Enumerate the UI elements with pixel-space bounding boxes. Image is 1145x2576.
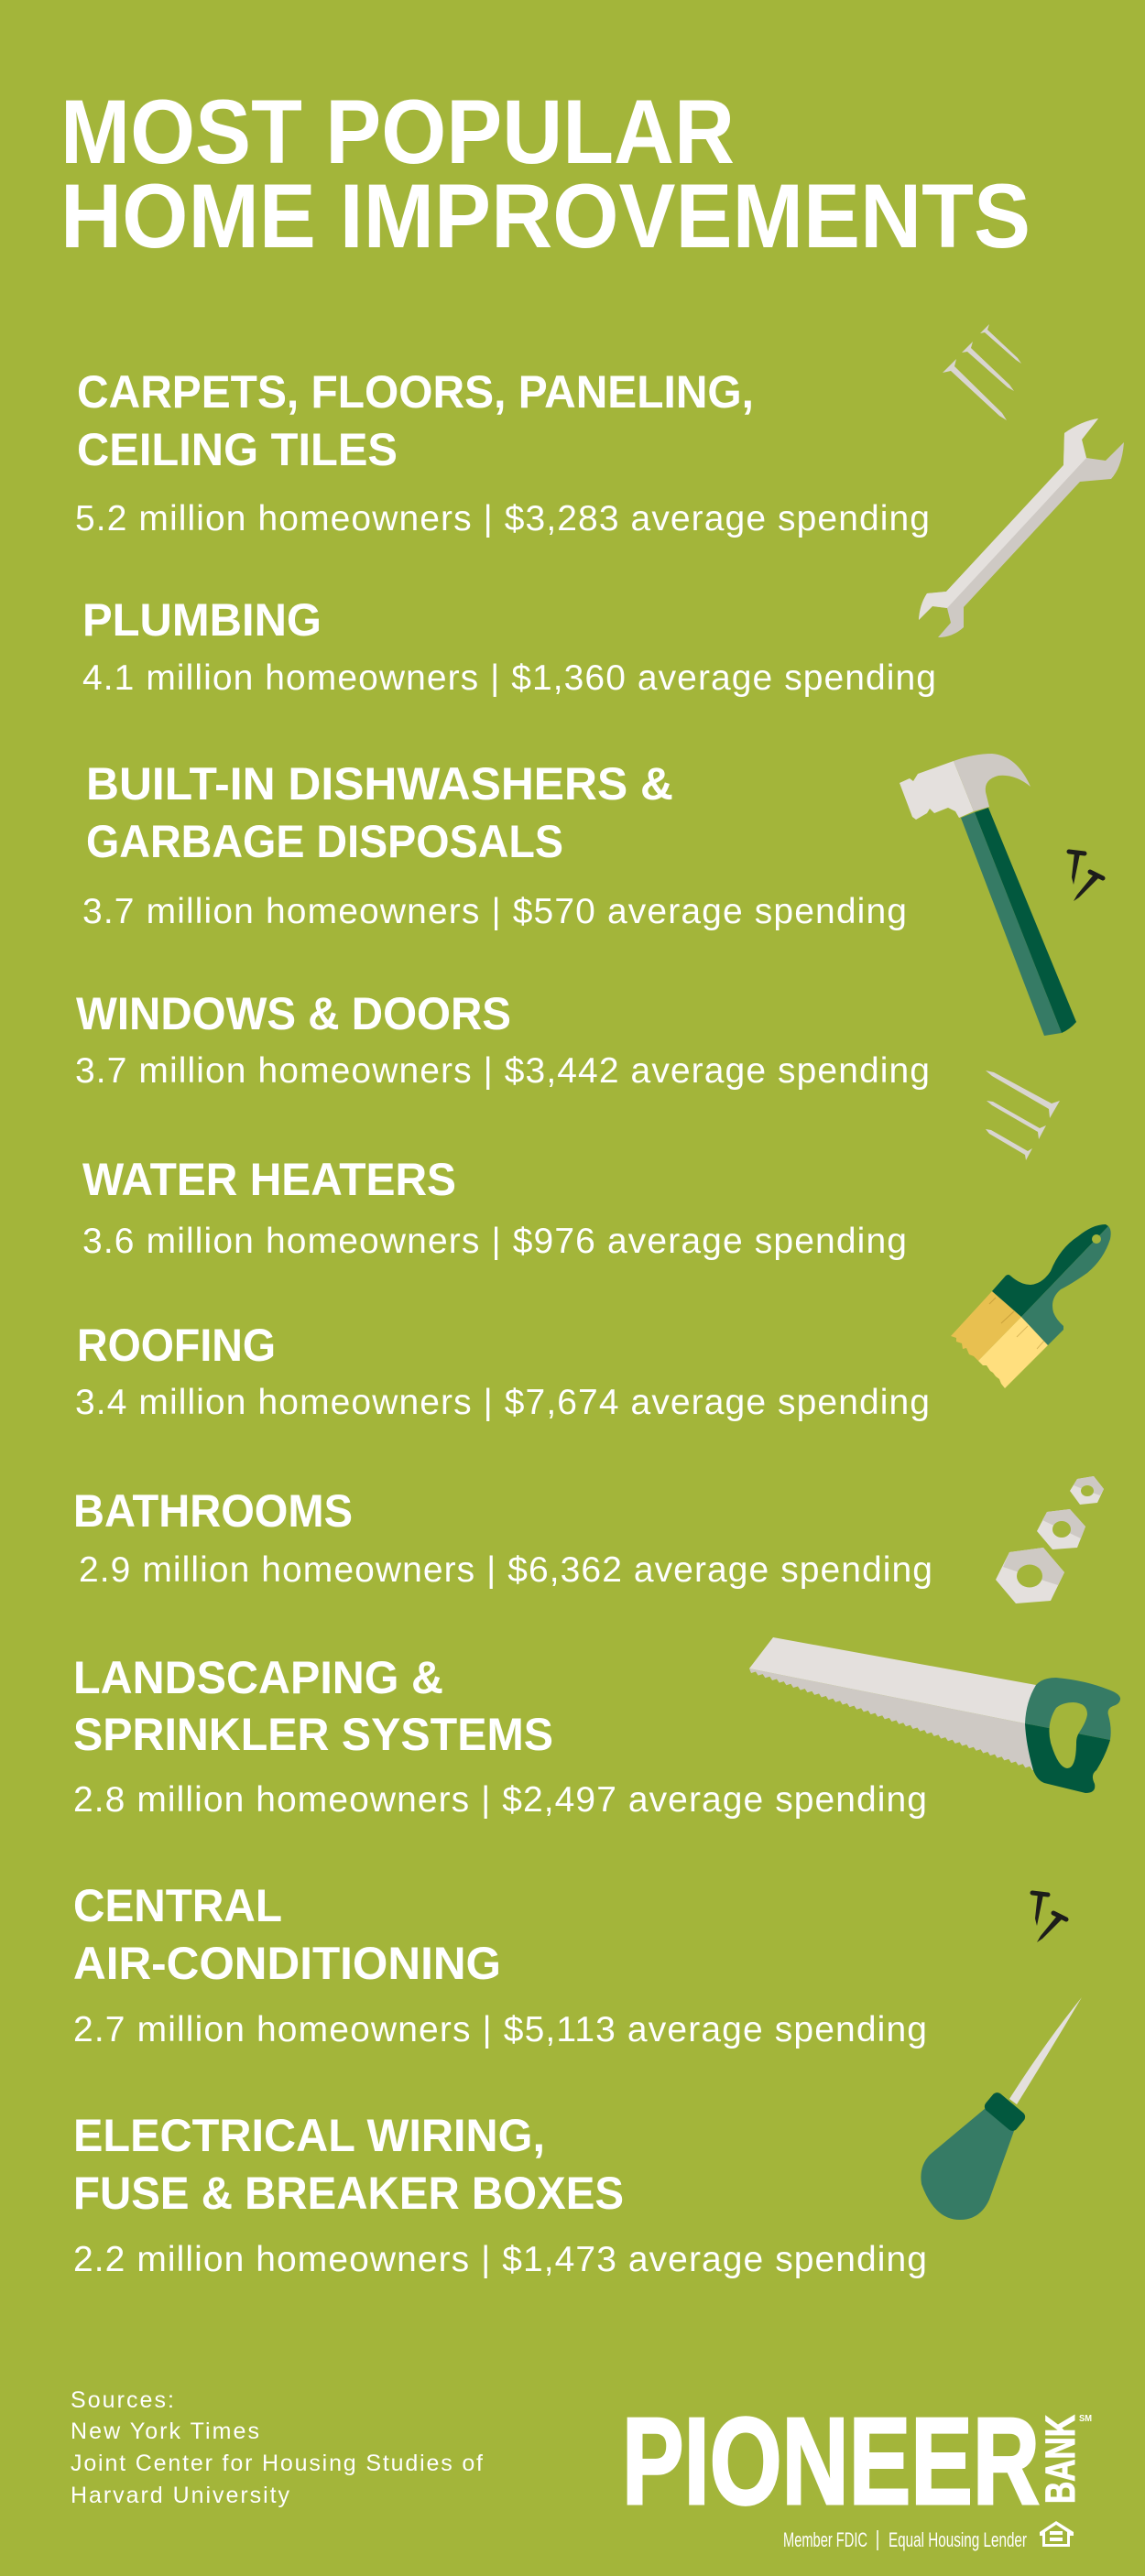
saw handle [1025,1678,1120,1793]
icon: equal housing [1040,2521,1074,2547]
heading: ROOFING [77,1320,276,1371]
heading [73,2110,624,2219]
heading: ELECTRICAL WIRING, [73,2110,545,2161]
heading [73,1880,501,1989]
title [60,81,1030,266]
member line: Member FDIC [783,2528,867,2551]
item: plumbing [82,594,936,698]
statistics: 3.7 million homeowners | $3,442 average spending [75,1051,930,1091]
awl collar [982,2091,1028,2133]
item: windows and doors [75,988,930,1091]
heading: GARBAGE DISPOSALS [86,816,563,867]
icon: awl [921,1997,1082,2220]
statistics: 4.1 million homeowners | $1,360 average spending [82,658,936,698]
statistics: 2.2 million homeowners | $1,473 average spending [73,2240,927,2279]
icon: hex nuts [996,1476,1104,1603]
heading: CEILING TILES [77,424,398,475]
heading: AIR-CONDITIONING [73,1938,501,1989]
heading: BATHROOMS [73,1485,353,1537]
icon: hammer [900,754,1076,1036]
sources: Joint Center for Housing Studies of [71,2451,483,2476]
icon: black tacks [1069,852,1103,901]
icon: black tacks lower [1032,1893,1066,1942]
member line: Equal Housing Lender [889,2528,1027,2551]
title: HOME IMPROVEMENTS [60,165,1030,266]
heading: PLUMBING [82,594,322,646]
statistics: 3.4 million homeowners | $7,674 average spending [75,1383,930,1422]
medium nut [1037,1509,1085,1549]
heading: BUILT-IN DISHWASHERS & [86,758,673,810]
heading: WINDOWS & DOORS [76,988,511,1039]
heading [73,1652,553,1760]
awl pin [1009,1997,1082,2104]
heading: FUSE & BREAKER BOXES [73,2168,624,2219]
small nut [1070,1476,1104,1505]
sources: Harvard University [71,2483,289,2508]
awl handle [921,2108,1014,2220]
hammer handle [961,808,1076,1036]
icon: paint brush [951,1224,1111,1388]
item: water heaters [82,1154,907,1261]
heading: WATER HEATERS [82,1154,456,1205]
sources [71,2387,483,2508]
icon: three silver nails middle [986,1071,1060,1160]
hammer head [900,754,1030,820]
icon: three silver nails top [943,324,1021,420]
statistics: 3.7 million homeowners | $570 average spending [82,892,907,931]
sources: New York Times [71,2418,259,2444]
statistics: 2.7 million homeowners | $5,113 average spending [73,2010,927,2049]
item: bathrooms [73,1485,932,1590]
statistics: 2.9 million homeowners | $6,362 average spending [79,1550,932,1590]
service mark: SM [1079,2414,1092,2424]
icon: wrench [919,418,1124,637]
heading: CARPETS, FLOORS, PANELING, [77,366,754,418]
item: central air-conditioning [73,1880,927,2049]
heading: SPRINKLER SYSTEMS [73,1709,553,1760]
bank vertical: BANK [1037,2415,1084,2504]
title: MOST POPULAR [60,81,735,182]
heading: LANDSCAPING & [73,1652,443,1703]
heading: CENTRAL [73,1880,282,1931]
logo: Pioneer Bank [622,2392,1092,2551]
bristles [951,1291,1048,1388]
sources: Sources: [71,2387,174,2413]
heading [77,366,754,475]
item: electrical wiring, fuse and breaker boxes [73,2110,927,2279]
item: roofing [75,1320,930,1422]
icon: hand saw [749,1637,1120,1793]
statistics: 2.8 million homeowners | $2,497 average spending [73,1780,927,1820]
item: carpets, floors, paneling, ceiling tiles [75,366,930,538]
item: landscaping and sprinkler systems [73,1652,927,1820]
large nut [996,1548,1064,1603]
item: built-in dishwashers and garbage disposals [82,758,907,931]
heading [86,758,673,867]
brush handle [992,1224,1111,1345]
saw blade [749,1637,1040,1770]
member line [783,2528,1027,2551]
statistics: 3.6 million homeowners | $976 average spending [82,1222,907,1261]
statistics: 5.2 million homeowners | $3,283 average spending [75,499,930,538]
